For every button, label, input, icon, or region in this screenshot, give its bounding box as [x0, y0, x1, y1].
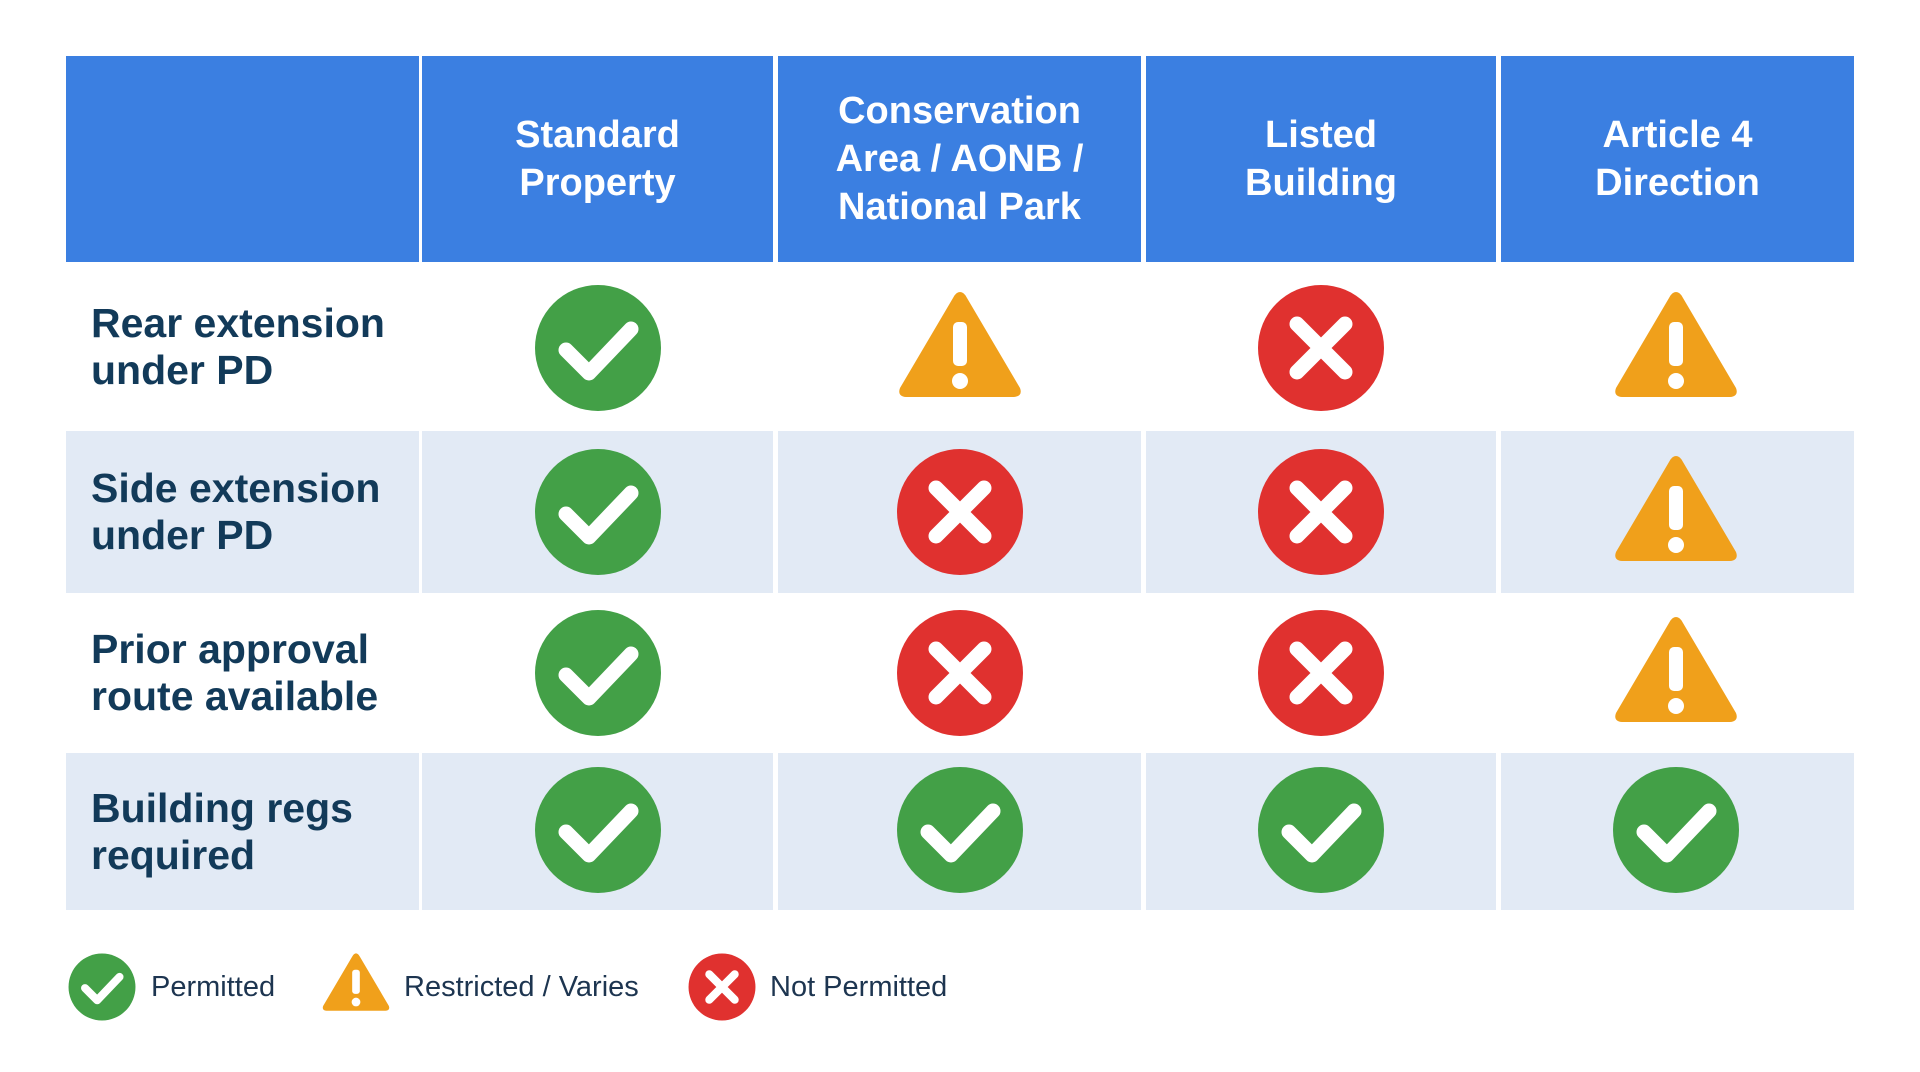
header: Listed Building: Building — [1245, 162, 1397, 204]
row label: Building regs — [91, 784, 353, 878]
header: Conservation Area — [778, 56, 1141, 262]
header: Article 4: Direction — [1595, 162, 1760, 204]
header: Conservation Area: Conservation — [838, 90, 1081, 132]
header: Article 4 — [1501, 56, 1854, 262]
header: Article 4: Article 4 — [1602, 114, 1752, 156]
header: Listed Building — [1146, 56, 1496, 262]
header: Listed Building: Listed — [1265, 114, 1377, 156]
row label: Building regs: required — [91, 832, 255, 878]
legend: not permitted — [688, 954, 947, 1020]
row backgrounds — [66, 431, 1854, 910]
row label: Side extension: Side extension — [91, 465, 380, 511]
row label: Rear extension: Rear extension — [91, 300, 385, 346]
legend: restricted: Restricted / Varies — [404, 971, 639, 1003]
header: blank — [66, 56, 419, 262]
table header — [66, 56, 1854, 262]
header: Standard Property: Standard — [515, 114, 680, 156]
header: Conservation Area: Area / AONB / — [836, 138, 1083, 180]
header: Standard Property — [422, 56, 773, 262]
row label: Building regs: Building regs — [91, 784, 353, 830]
legend — [68, 953, 947, 1020]
row label: Prior approval: route available — [91, 673, 378, 719]
header: Conservation Area: National Park — [838, 186, 1081, 228]
icons row 1 — [535, 285, 1737, 411]
icons row 4 — [535, 767, 1739, 893]
header: Standard Property: Property — [519, 162, 676, 204]
row label: Side extension: under PD — [91, 512, 273, 558]
row label: Side extension — [91, 465, 380, 558]
legend: permitted — [68, 954, 275, 1020]
row label: Prior approval — [91, 626, 378, 719]
legend: restricted — [322, 953, 639, 1011]
row label: Rear extension: under PD — [91, 346, 273, 392]
icons row 2 — [535, 449, 1737, 575]
legend: permitted: Permitted — [151, 971, 275, 1003]
row label: Rear extension — [91, 300, 385, 392]
row label: Prior approval: Prior approval — [91, 626, 369, 672]
icons row 3 — [535, 610, 1737, 736]
legend: not permitted: Not Permitted — [770, 971, 947, 1003]
